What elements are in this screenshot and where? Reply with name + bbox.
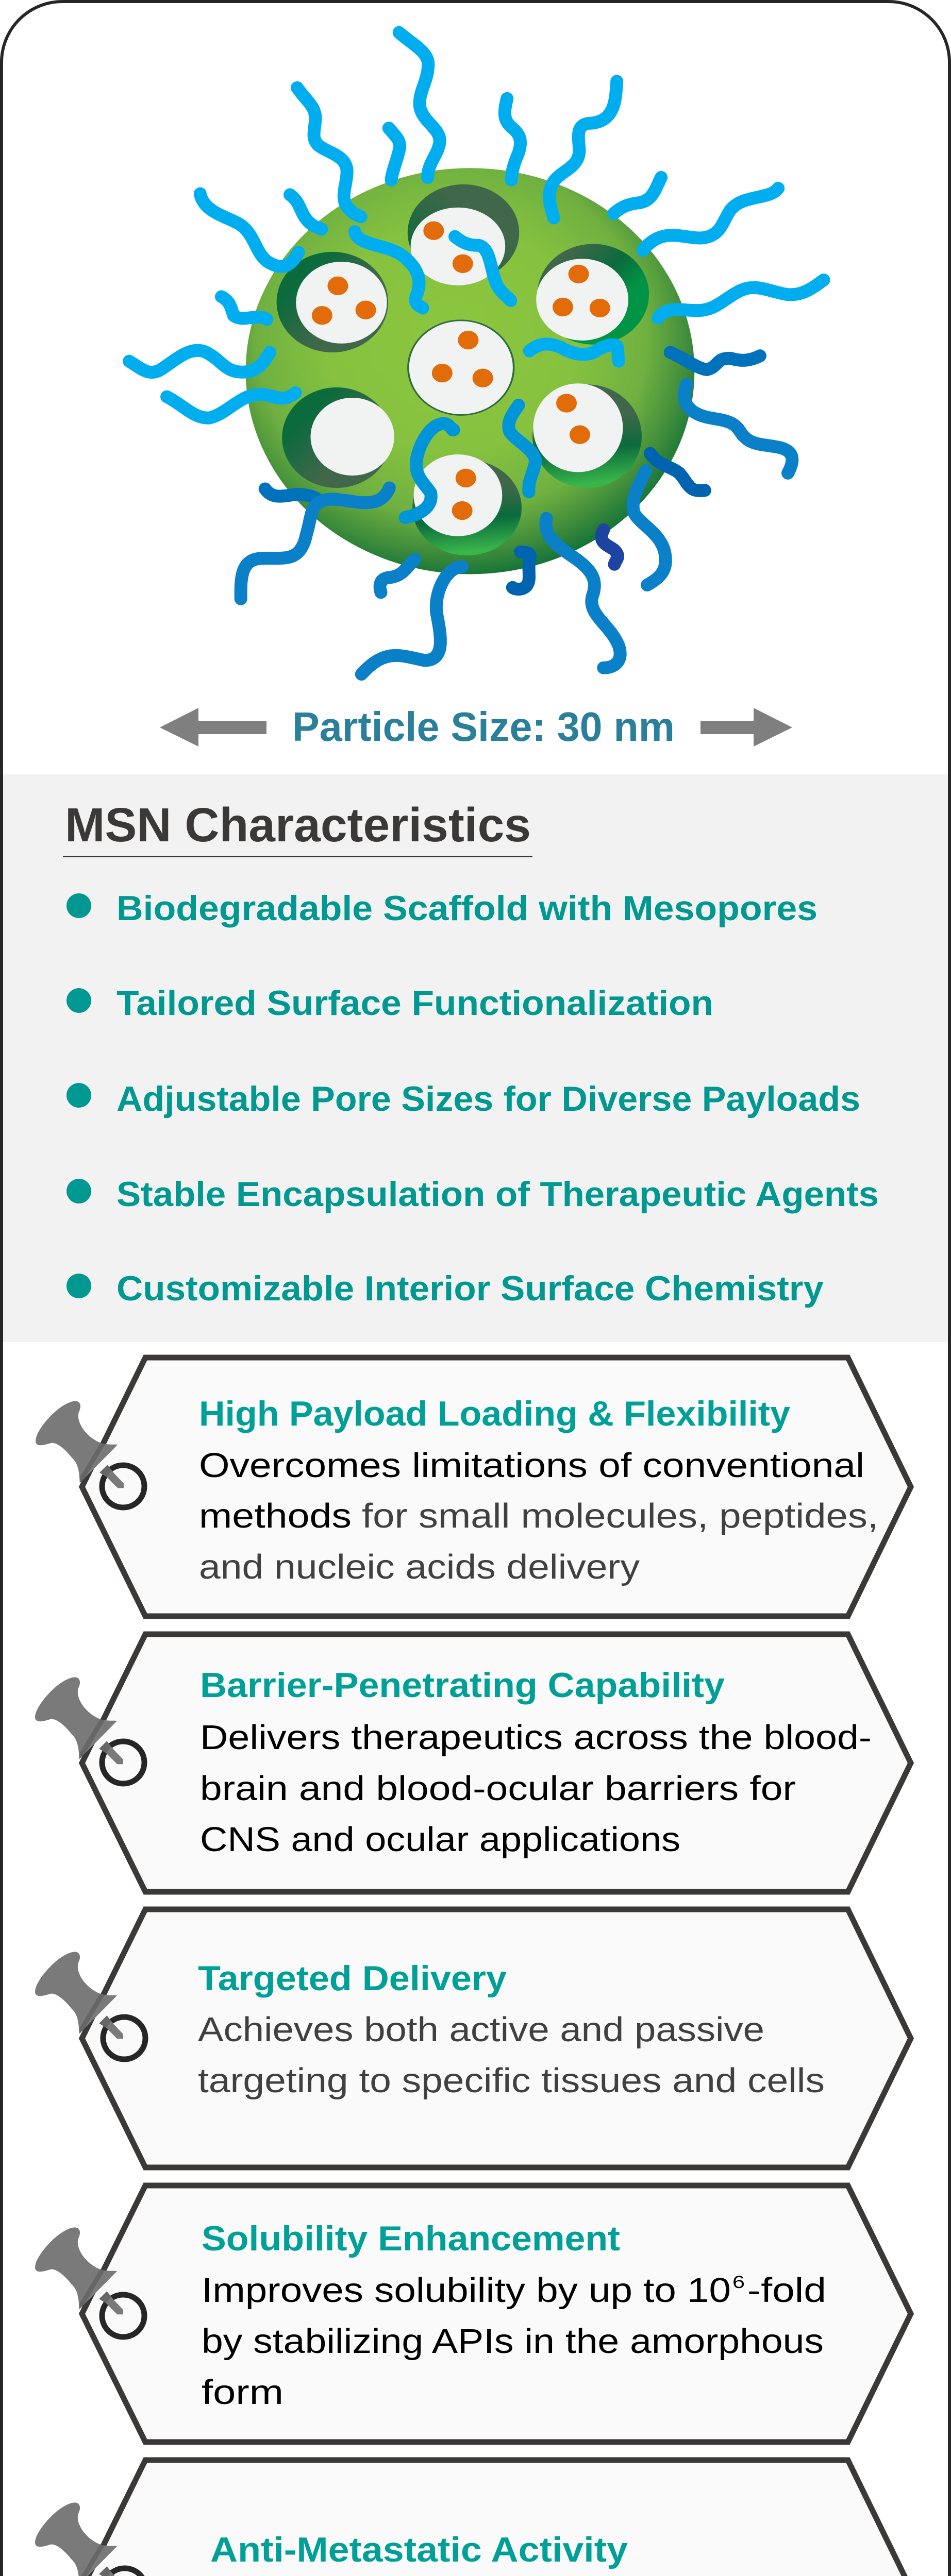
illustration: mesoporous silica nanoparticle bbox=[129, 32, 824, 674]
pores with payload bbox=[277, 184, 649, 555]
card body: -fold bbox=[747, 2271, 826, 2310]
panel: MSN characteristics bbox=[3, 774, 948, 1342]
card body: form bbox=[202, 2373, 283, 2412]
heading: MSN Characteristics bbox=[65, 798, 531, 852]
card title: Solubility Enhancement bbox=[202, 2219, 620, 2258]
card body: Achieves both active and passive bbox=[198, 2010, 764, 2049]
card: High Payload Loading & Flexibility bbox=[36, 1358, 911, 1616]
card: Targeted Delivery bbox=[35, 1909, 911, 2167]
icon: pushpin bbox=[36, 1401, 124, 1488]
card body: 6 bbox=[732, 2273, 745, 2292]
icon: pushpin bbox=[35, 2502, 123, 2576]
card title: High Payload Loading & Flexibility bbox=[199, 1394, 790, 1433]
silica sphere bbox=[246, 168, 694, 574]
bullet 2: Tailored Surface Functionalization bbox=[116, 984, 713, 1023]
card: Solubility Enhancement bbox=[35, 2185, 911, 2442]
card body: Overcomes limitations of conventional bbox=[199, 1446, 864, 1485]
arrow: right bbox=[700, 708, 792, 747]
card body: CNS and ocular applications bbox=[200, 1820, 680, 1859]
icon: pushpin bbox=[35, 1952, 123, 2039]
icon: ring bbox=[102, 2295, 144, 2337]
card body bbox=[199, 1446, 878, 1586]
arrow: left bbox=[160, 708, 266, 747]
surface polymer strands bbox=[129, 32, 824, 674]
particle size text: Particle Size: 30 nm bbox=[292, 704, 675, 750]
particle size label with arrows bbox=[160, 704, 792, 750]
bullet 5: Customizable Interior Surface Chemistry bbox=[116, 1269, 824, 1308]
card title: Barrier-Penetrating Capability bbox=[200, 1666, 725, 1705]
bullet 1: Biodegradable Scaffold with Mesopores bbox=[116, 889, 817, 928]
card body: and nucleic acids delivery bbox=[199, 1548, 640, 1586]
card body: Improves solubility by up to 10 bbox=[202, 2271, 731, 2310]
icon: ring bbox=[102, 1741, 144, 1784]
icon: ring bbox=[104, 2568, 146, 2576]
card body bbox=[198, 2010, 825, 2100]
card body: brain and blood-ocular barriers for bbox=[200, 1769, 796, 1808]
icon: pushpin bbox=[35, 2227, 123, 2314]
card body bbox=[202, 2271, 826, 2412]
card body: Delivers therapeutics across the blood- bbox=[200, 1718, 872, 1757]
card body: for small molecules, peptides, bbox=[362, 1497, 878, 1535]
icon: ring bbox=[103, 2017, 145, 2059]
bullet 3: Adjustable Pore Sizes for Diverse Payloads bbox=[116, 1079, 860, 1118]
card title: Targeted Delivery bbox=[198, 1959, 507, 1998]
icon: pushpin bbox=[35, 1677, 123, 1764]
card body: targeting to specific tissues and cells bbox=[198, 2061, 825, 2100]
card body: by stabilizing APIs in the amorphous bbox=[202, 2322, 824, 2361]
card body: methods bbox=[199, 1497, 352, 1535]
card: Anti-Metastatic Activity bbox=[35, 2460, 911, 2576]
card title: Anti-Metastatic Activity bbox=[210, 2530, 628, 2569]
bullet 4: Stable Encapsulation of Therapeutic Agents bbox=[116, 1175, 879, 1214]
card: Barrier-Penetrating Capability bbox=[35, 1634, 911, 1892]
card body bbox=[200, 1718, 872, 1859]
icon: ring bbox=[102, 1465, 144, 1507]
